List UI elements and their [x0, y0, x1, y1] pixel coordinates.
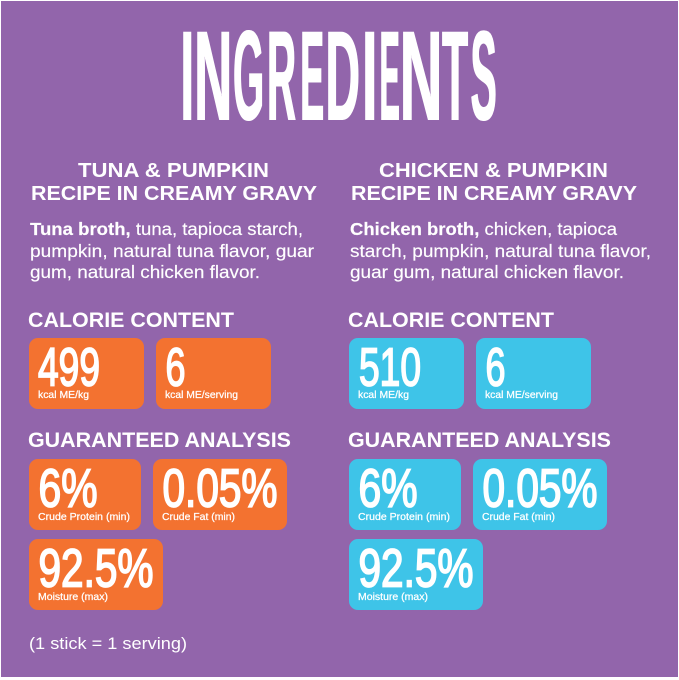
stat: 510 kcal ME/kg: kcal ME/kg: [358, 389, 409, 401]
stat: 92.5% moisture: 92.5%: [358, 540, 474, 598]
heading: guaranteed analysis: GUARANTEED ANALYSIS: [28, 429, 291, 452]
title: E: [300, 5, 324, 148]
stat: 6% crude protein: 6%: [358, 460, 418, 518]
stat: 499 kcal ME/kg: kcal ME/kg: [38, 389, 89, 401]
text block: tuna ingredients: [30, 219, 314, 282]
title: E: [380, 5, 400, 148]
stat: 0.05% crude fat: 0.05%: [162, 460, 278, 518]
stat: 6 kcal ME/serving: [156, 338, 271, 409]
stat: 510 kcal ME/kg: [349, 338, 464, 409]
title: R: [267, 5, 296, 148]
title: G: [233, 5, 264, 148]
text block: tuna ingredients: pumpkin, natural tuna flavor, guar: [30, 241, 314, 261]
stat: 6% crude protein: Crude Protein (min): [358, 511, 450, 523]
stat: 6% crude protein: Crude Protein (min): [38, 511, 130, 523]
stat: 92.5% moisture: [349, 539, 483, 610]
stat: 92.5% moisture: 92.5%: [38, 540, 154, 598]
stat: 6% crude protein: 6%: [38, 460, 98, 518]
title: N: [400, 5, 443, 148]
text block: tuna ingredients: gum, natural chicken flavor.: [30, 262, 260, 282]
stat: 0.05% crude fat: 0.05%: [482, 460, 598, 518]
title: D: [326, 5, 360, 148]
text block: chicken ingredients: starch, pumpkin, natural tuna flavor,: [350, 241, 651, 261]
stat: 6 kcal ME/serving: kcal ME/serving: [165, 389, 238, 401]
stat: 6 kcal ME/serving: [476, 338, 591, 409]
stat: 0.05% crude fat: [473, 459, 607, 530]
stat: 6% crude protein: [29, 459, 141, 530]
footnote: (1 stick = 1 serving): [29, 635, 187, 653]
stat: 0.05% crude fat: [153, 459, 287, 530]
stat: 6% crude protein: [349, 459, 461, 530]
title: I: [362, 5, 377, 148]
heading: chicken recipe: [351, 159, 637, 205]
text block: chicken ingredients: guar gum, natural chicken flavor.: [350, 262, 624, 282]
stat: 92.5% moisture: [29, 539, 163, 610]
heading: calorie content: CALORIE CONTENT: [28, 309, 234, 332]
text: S: [471, 5, 497, 148]
stat: 499 kcal ME/kg: [29, 338, 144, 409]
panel: chicken recipe: [348, 159, 651, 610]
heading: tuna recipe: RECIPE IN CREAMY GRAVY: [31, 182, 317, 205]
heading: tuna recipe: TUNA & PUMPKIN: [78, 159, 269, 182]
title: T: [442, 5, 468, 148]
heading: chicken recipe: RECIPE IN CREAMY GRAVY: [351, 182, 637, 205]
heading: chicken recipe: CHICKEN & PUMPKIN: [379, 159, 608, 182]
stat: 6 kcal ME/serving: 6: [486, 338, 506, 398]
text block: chicken ingredients: Chicken broth, chicken, tapioca: [350, 219, 617, 239]
title: N: [194, 5, 232, 148]
stat: 92.5% moisture: Moisture (max): [38, 591, 108, 603]
title: I: [180, 5, 194, 148]
panel: tuna recipe: [28, 159, 317, 610]
text block: tuna ingredients: Tuna broth, tuna, tapioca starch,: [30, 219, 303, 239]
stat: 6 kcal ME/serving: 6: [166, 338, 186, 398]
stat: 0.05% crude fat: Crude Fat (min): [162, 511, 235, 523]
heading: tuna recipe: [31, 159, 317, 205]
heading: calorie content: CALORIE CONTENT: [348, 309, 554, 332]
heading: guaranteed analysis: GUARANTEED ANALYSIS: [348, 429, 611, 452]
text block: chicken ingredients: [350, 219, 651, 282]
stat: 510 kcal ME/kg: 510: [359, 338, 421, 398]
stat: 0.05% crude fat: Crude Fat (min): [482, 511, 555, 523]
stat: 92.5% moisture: Moisture (max): [358, 591, 428, 603]
stat: 499 kcal ME/kg: 499: [38, 338, 100, 398]
stat: 6 kcal ME/serving: kcal ME/serving: [485, 389, 558, 401]
